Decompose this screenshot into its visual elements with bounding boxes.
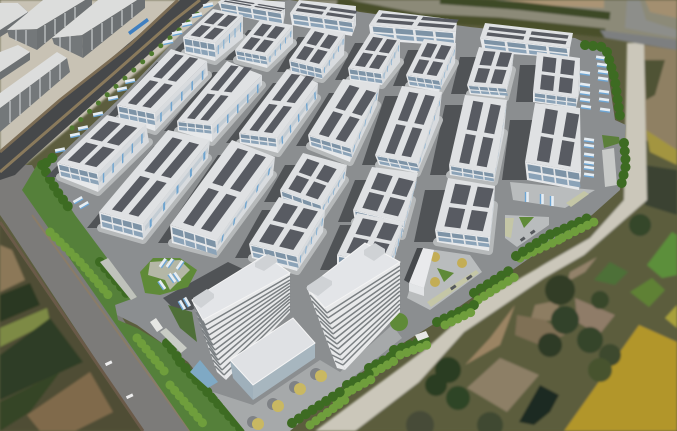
building B6 bbox=[170, 140, 275, 255]
ground shadows bbox=[46, 25, 537, 310]
building H1 bbox=[308, 79, 380, 162]
tower two bbox=[307, 243, 400, 370]
building F3 bbox=[467, 47, 514, 98]
top-left ground bbox=[0, 0, 225, 185]
green verge west bbox=[22, 155, 243, 431]
building F4 bbox=[533, 52, 580, 108]
tree line along upper road bbox=[72, 12, 200, 128]
round lawn bbox=[390, 313, 408, 331]
building C1 bbox=[183, 9, 243, 61]
solar buildings top row bbox=[218, 0, 573, 58]
upper road bbox=[0, 0, 210, 180]
top road and tree bands bbox=[290, 0, 677, 50]
glass canopy bbox=[190, 360, 218, 388]
plaza in front of towers bbox=[213, 325, 402, 431]
building F1 bbox=[348, 33, 400, 85]
building I1 bbox=[353, 167, 418, 236]
building C2 bbox=[235, 20, 293, 68]
east parking vans bbox=[580, 56, 610, 178]
south parking island bbox=[505, 215, 549, 247]
building top 1 bbox=[218, 0, 286, 26]
podium building bbox=[230, 318, 315, 400]
small service building bbox=[404, 248, 434, 296]
building B4 bbox=[239, 69, 318, 153]
building B1 bbox=[57, 115, 149, 192]
concrete road right bbox=[315, 43, 647, 431]
left farmland bbox=[0, 222, 143, 431]
building I3 bbox=[337, 213, 403, 280]
building F2 bbox=[406, 39, 456, 92]
building G2 bbox=[449, 95, 507, 182]
green patch beside tower bbox=[168, 305, 197, 342]
row of small solar buildings bbox=[183, 9, 580, 108]
parking island with lawn bbox=[407, 248, 482, 310]
east green and hedges bbox=[292, 45, 626, 425]
green parking island bbox=[140, 258, 197, 295]
building B7 bbox=[280, 153, 347, 218]
building top 3 bbox=[369, 10, 459, 46]
building G1 bbox=[375, 86, 442, 173]
roof box bbox=[255, 254, 277, 271]
building G3 bbox=[525, 103, 581, 190]
building B8 bbox=[249, 197, 325, 271]
building I2 bbox=[435, 178, 495, 251]
plaza trees bbox=[247, 368, 327, 430]
building B5 bbox=[99, 130, 210, 240]
loading plaza east bbox=[510, 182, 595, 208]
building B3 bbox=[177, 61, 262, 142]
building top 4 bbox=[480, 23, 573, 58]
left diagonal road bbox=[0, 165, 190, 431]
row of long solar buildings bbox=[117, 49, 595, 208]
small white gatehouse bbox=[415, 331, 429, 341]
building C3 bbox=[289, 27, 345, 79]
building top 2 bbox=[290, 0, 357, 36]
tower one bbox=[192, 254, 290, 380]
old white buildings top left bbox=[0, 0, 145, 132]
building B2 bbox=[117, 49, 208, 131]
roof box bbox=[307, 276, 332, 296]
farmland right bbox=[340, 40, 677, 431]
west parking vans bbox=[55, 2, 213, 310]
